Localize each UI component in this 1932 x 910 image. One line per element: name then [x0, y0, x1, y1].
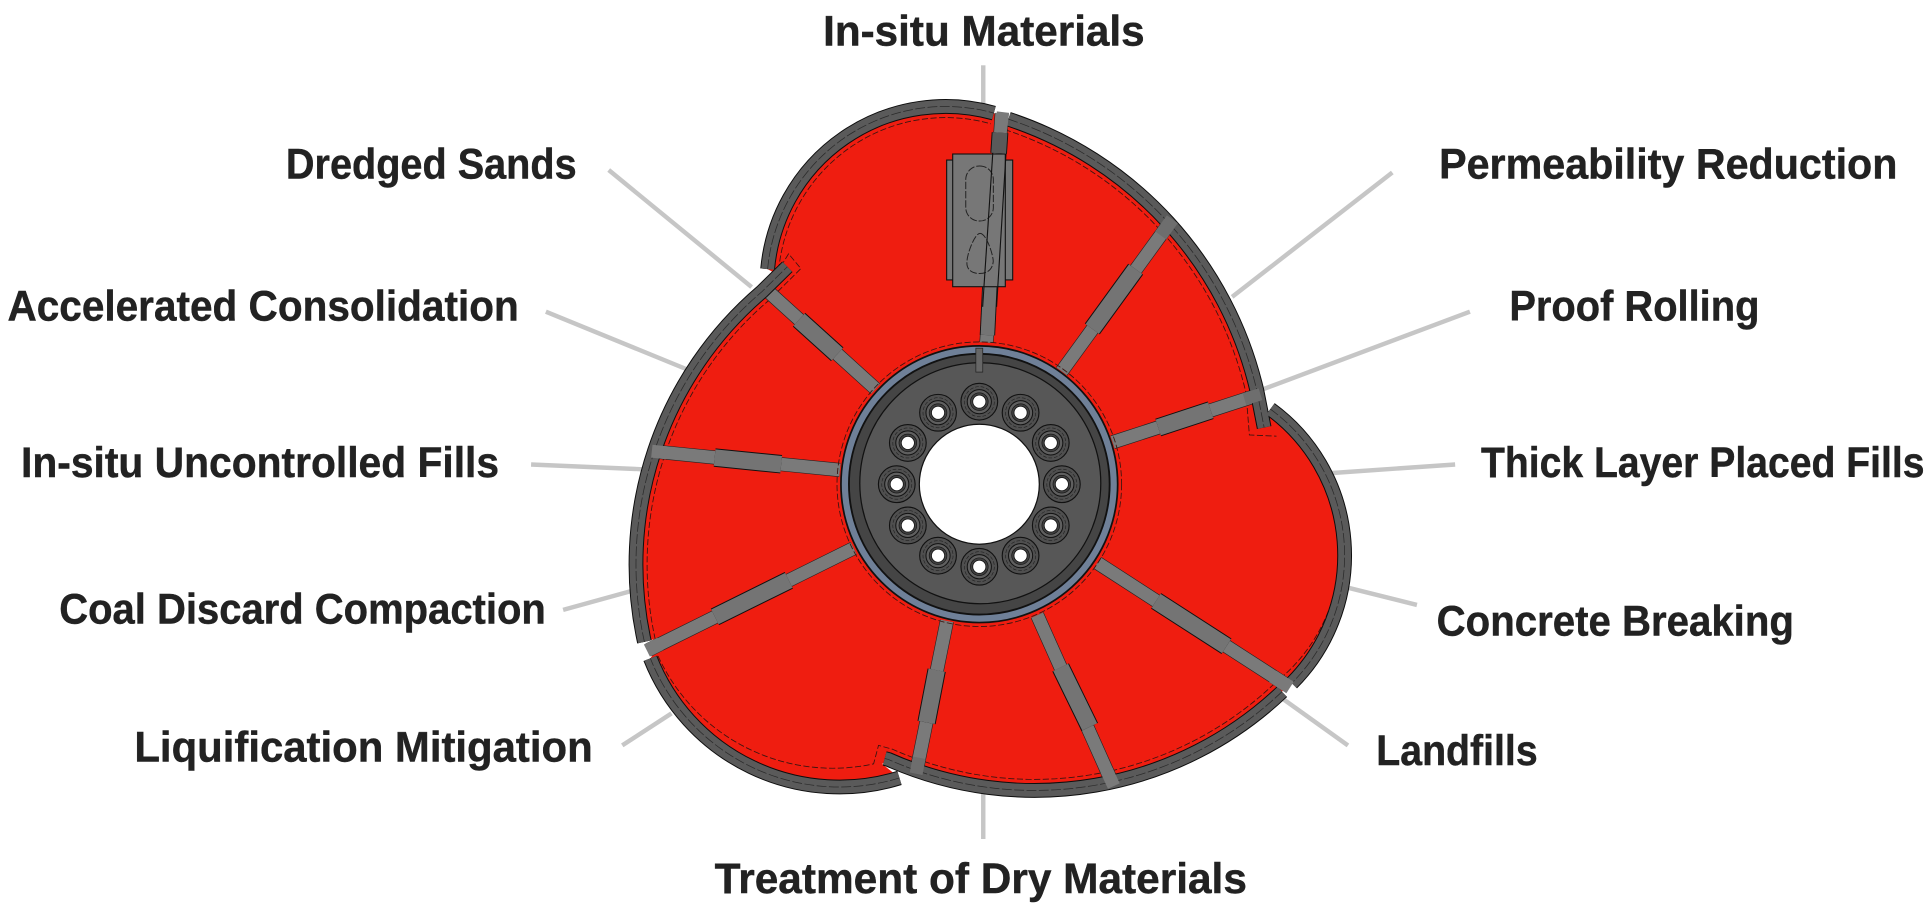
label: Proof Rolling: Proof Rolling — [1509, 283, 1759, 330]
leader line: Thick Layer Placed Fills — [1331, 464, 1455, 473]
label: In-situ Uncontrolled Fills: In-situ Uncontrolled Fills — [21, 440, 499, 487]
label: In-situ Materials: In-situ Materials — [823, 9, 1145, 56]
spoke: west — [654, 451, 840, 470]
label: Treatment of Dry Materials: Treatment of Dry Materials — [715, 856, 1247, 903]
spoke: east-north-east — [1113, 394, 1260, 442]
spoke tips over the bands — [647, 112, 1290, 786]
leader line: In-situ Materials — [981, 65, 985, 106]
inner face — [860, 363, 1101, 604]
spoke: west-south-west — [648, 548, 854, 650]
leader line: Dredged Sands — [609, 170, 752, 287]
spoke: north-east — [1062, 221, 1171, 371]
inspection plate — [947, 133, 1013, 307]
leader line: Concrete Breaking — [1348, 588, 1417, 605]
outer dark bands — [636, 106, 1345, 790]
leader line: Coal Discard Compaction — [563, 590, 635, 610]
spoke: south-east — [1097, 563, 1286, 685]
label: Accelerated Consolidation: Accelerated Consolidation — [7, 283, 519, 330]
dashed seam lines on the lobes — [647, 118, 1340, 779]
label: Landfills: Landfills — [1376, 728, 1538, 775]
dark disc — [849, 354, 1110, 615]
leader line: Liquification Mitigation — [622, 713, 672, 745]
leader line: Landfills — [1279, 696, 1348, 745]
blue ring — [841, 346, 1118, 623]
centre hole — [919, 424, 1039, 544]
label: Coal Discard Compaction: Coal Discard Compaction — [59, 586, 546, 633]
leader line: Treatment of Dry Materials — [981, 792, 985, 839]
central hub — [837, 342, 1122, 627]
spoke: south-south-east — [1037, 615, 1113, 784]
spoke: top, with inspection plate — [947, 113, 1013, 343]
label: Dredged Sands: Dredged Sands — [286, 142, 577, 189]
leader line: In-situ Uncontrolled Fills — [531, 464, 646, 469]
leader line: Permeability Reduction — [1232, 172, 1392, 297]
label: Permeability Reduction: Permeability Reduction — [1439, 142, 1897, 189]
leader line: Accelerated Consolidation — [546, 312, 688, 370]
red spiral lobes — [636, 106, 1345, 790]
spoke: north-west — [763, 287, 876, 389]
label: Concrete Breaking: Concrete Breaking — [1437, 599, 1794, 646]
hub slot — [976, 348, 983, 372]
leader line: Proof Rolling — [1263, 312, 1470, 389]
spoke: south-south-west — [916, 621, 947, 772]
bolt circle — [878, 383, 1080, 585]
label: Liquification Mitigation: Liquification Mitigation — [134, 724, 593, 771]
